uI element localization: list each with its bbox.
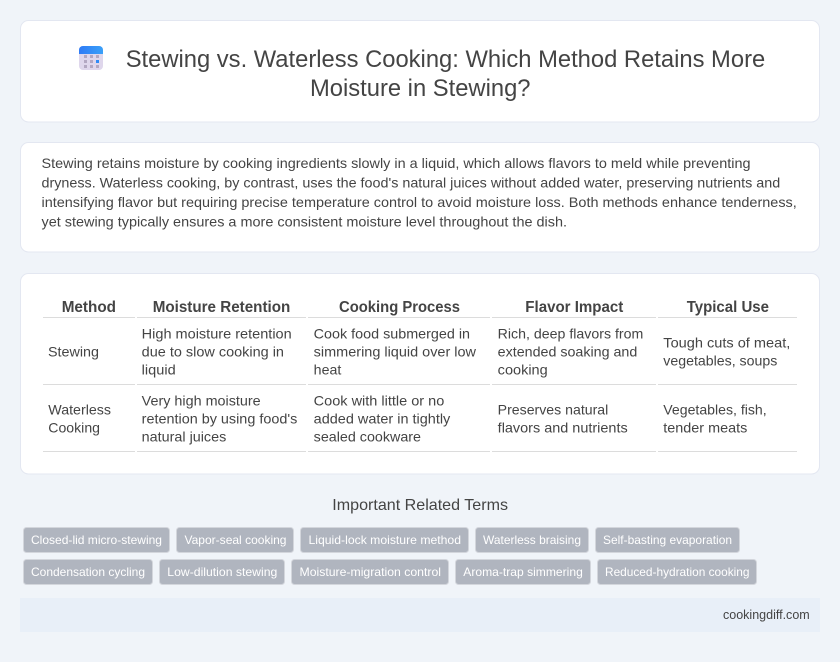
table row: waterless cooking: tender meats [663,420,747,436]
related terms chips: Reduced-hydration cooking [605,565,750,579]
table header row: Moisture Retention [153,299,290,316]
table row: waterless cooking: Preserves natural [498,402,608,418]
intro text: Stewing retains moisture by cooking ingredients slowly in a liquid, which allows flavors to meld while preventing [42,155,750,171]
table row: stewing: cooking [498,362,548,378]
panel: header [20,20,820,122]
table row: stewing: High moisture retention [142,326,292,342]
table row: stewing: extended soaking and [498,344,637,360]
table header row: Typical Use [687,299,769,316]
table row: waterless cooking: Waterless [48,402,111,418]
related terms chips: Vapor-seal cooking [184,533,286,547]
table row: stewing: Stewing [48,344,99,360]
table row: stewing: Rich, deep flavors from [498,326,643,342]
title: Stewing vs. Waterless Cooking: Which Method Retains More [126,46,765,73]
related terms chips: Low-dilution stewing [167,565,277,579]
footer site name: cookingdiff.com [723,607,810,622]
table row: stewing: liquid [142,362,176,378]
related terms chips: Condensation cycling [31,565,145,579]
table row: waterless cooking: natural juices [142,428,226,444]
table row: stewing: Tough cuts of meat, [663,334,790,350]
intro text: dryness. Waterless cooking, by contrast, uses the food's natural juices without added water, preserving nutrients and [42,174,780,190]
heading: important related terms: Important Related Terms [332,497,508,514]
related terms chips: Moisture-migration control [300,565,441,579]
intro text [42,155,797,230]
table row: stewing: Cook food submerged in [314,326,470,342]
table row: waterless cooking: sealed cookware [314,428,421,444]
intro text: yet stewing typically ensures a more consistent moisture level throughout the dish. [42,214,567,230]
panel: introduction [20,142,820,252]
title [126,46,765,102]
related terms chips: Liquid-lock moisture method [308,533,461,547]
related terms chips: Self-basting evaporation [603,533,732,547]
related terms chips: Aroma-trap simmering [463,565,583,579]
table row: waterless cooking: Cook with little or no [314,392,445,408]
table row: waterless cooking: added water in tightly [314,410,450,426]
table row: waterless cooking: Cooking [48,420,100,436]
table row: stewing [43,326,797,385]
table header row: Method [62,299,116,316]
table row: waterless cooking: Very high moisture [142,392,261,408]
title: Moisture in Stewing? [310,75,530,102]
table row: waterless cooking: Vegetables, fish, [663,402,767,418]
related terms chips: Closed-lid micro-stewing [31,533,162,547]
table header row: Flavor Impact [525,299,624,316]
panel: comparison table [20,274,820,474]
table row: stewing: due to slow cooking in [142,344,284,360]
table header row [43,299,797,318]
intro text: intensifying flavor but requiring precise temperature control to avoid moisture loss. Both methods enhance tenderness, [42,194,797,210]
footer [20,598,820,632]
table row: stewing: simmering liquid over low [314,344,477,360]
table header row: Cooking Process [339,299,460,316]
icon: calendar [79,46,103,70]
related terms chips: Waterless braising [483,533,581,547]
related terms chips [24,528,756,584]
table row: waterless cooking [43,392,797,452]
table row: stewing: vegetables, soups [663,352,777,368]
table row: waterless cooking: retention by using food's [142,410,297,426]
table row: waterless cooking: flavors and nutrients [498,420,628,436]
table row: stewing: heat [314,362,341,378]
